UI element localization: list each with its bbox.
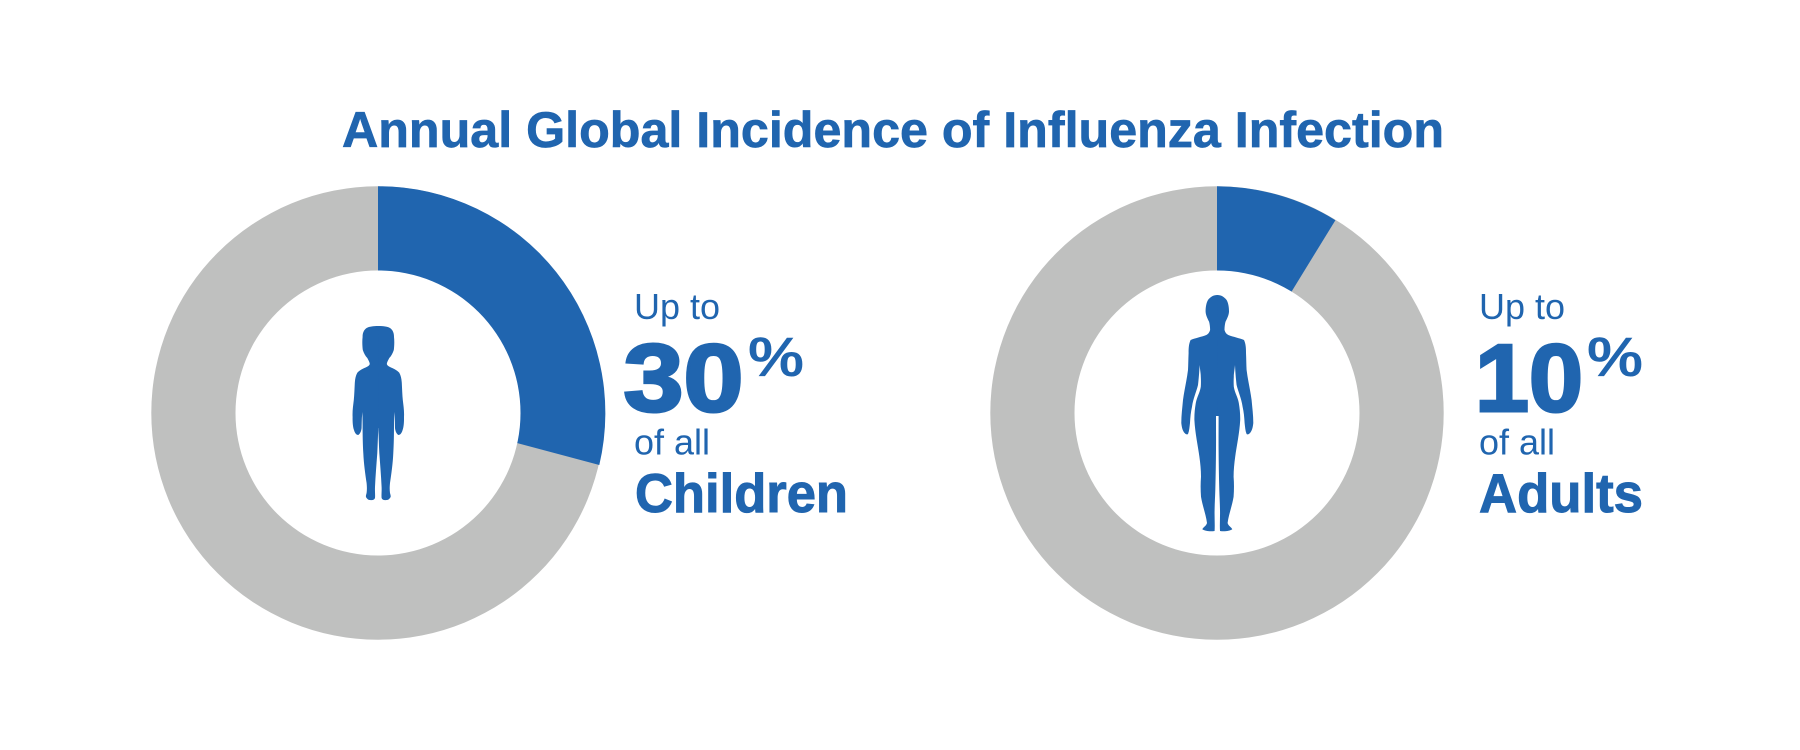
callout: children statistic: Children — [635, 462, 848, 524]
icon: adult silhouette — [1181, 295, 1253, 531]
callout: adults statistic: Up to — [1479, 286, 1565, 327]
callout: children statistic: 30 — [624, 325, 744, 432]
callout: children statistic: Up to — [634, 286, 720, 327]
callout: adults statistic: 10 — [1475, 325, 1583, 432]
panel: children — [151, 186, 848, 640]
donut chart: adults 10% — [990, 186, 1444, 640]
panel: adults — [990, 186, 1643, 640]
callout: children statistic: % — [748, 325, 804, 388]
icon: child silhouette — [353, 326, 404, 500]
title: Annual Global Incidence of Influenza Infection — [342, 102, 1444, 158]
callout: adults statistic: % — [1587, 325, 1643, 388]
callout: adults statistic: Adults — [1479, 462, 1643, 524]
callout: adults statistic — [1475, 286, 1643, 524]
callout: children statistic: of all — [634, 422, 710, 462]
callout: children statistic — [624, 286, 848, 524]
donut chart: children 30% — [151, 186, 605, 640]
callout: adults statistic: of all — [1479, 422, 1555, 462]
